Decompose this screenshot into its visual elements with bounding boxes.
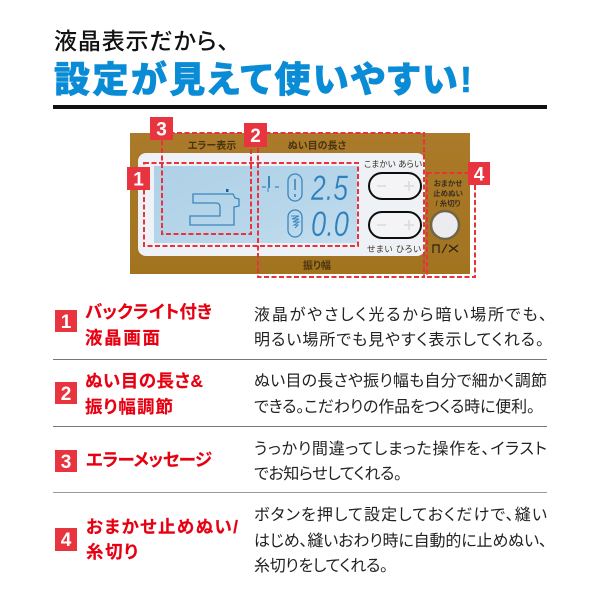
white control plate xyxy=(138,153,425,256)
label: zigzag width: 振り幅 xyxy=(303,259,331,272)
row 3 description: うっかり間違ってしまった操作を、イラスト xyxy=(254,440,547,458)
panel badge 2 xyxy=(244,123,267,147)
icon: stitch and scissors xyxy=(433,244,458,253)
label: stitch length: ぬい目の長さ xyxy=(288,140,346,152)
callout frame 3: error display xyxy=(162,133,251,234)
title underline rule xyxy=(53,105,547,109)
callout frame 1: LCD xyxy=(144,163,358,246)
title: intro line: 液晶表示だから、 xyxy=(54,28,229,54)
LCD screen xyxy=(154,166,357,243)
row 4 heading: おまかせ止めぬい/ xyxy=(86,517,238,537)
button: zigzag width xyxy=(369,212,421,238)
row 1 heading: バックライト付き xyxy=(85,302,212,322)
row 2 description: ぬい目の長さや振り幅も自分で細かく調節 xyxy=(254,372,547,390)
row 1 heading: 液晶画面 xyxy=(85,328,160,348)
callout frame 2: stitch adjustment xyxy=(258,133,424,277)
row 2 description xyxy=(254,372,547,416)
row 3 description xyxy=(254,440,547,483)
icon: straight stitch pill xyxy=(288,174,302,201)
icon: zigzag stitch pill xyxy=(288,210,302,237)
label: auto lock stitch / thread cut: 止めぬい xyxy=(433,188,463,198)
brown panel background xyxy=(130,133,470,274)
row 4 description: はじめ、縫いおわり時に自動的に止めぬい、 xyxy=(254,532,547,550)
row 3 description: でお知らせしてくれる。 xyxy=(254,465,402,483)
row 2 number badge xyxy=(55,382,77,405)
row 4 description: 糸切りをしてくれる。 xyxy=(254,557,388,575)
button: auto stitch xyxy=(431,211,459,239)
row 3 heading: エラーメッセージ xyxy=(86,450,212,470)
panel badge 4: 4 xyxy=(474,164,485,186)
row 4 number badge: 4 xyxy=(61,530,72,551)
row 4 heading xyxy=(86,517,238,562)
row 2: stitch length and width xyxy=(55,371,547,417)
panel badge 4 xyxy=(468,162,490,186)
panel badge 3 xyxy=(150,117,173,140)
row 3 number badge: 3 xyxy=(61,452,71,473)
panel badge 1: 1 xyxy=(133,170,144,190)
row 4 description: ボタンを押して設定しておくだけで、縫い xyxy=(254,506,547,524)
label: error display: エラー表示 xyxy=(188,139,236,152)
row 4: auto lock stitch and thread cut xyxy=(55,506,547,575)
label: auto lock stitch / thread cut xyxy=(433,179,463,208)
row 3 number badge xyxy=(55,450,77,473)
row 2 heading: ぬい目の長さ& xyxy=(85,371,203,391)
row 2 description: できる。こだわりの作品をつくる時に便利。 xyxy=(254,398,535,416)
label: fine / coarse: こまかい あらい xyxy=(364,159,422,169)
panel badge 3: 3 xyxy=(156,120,167,140)
row 1 description: 液晶がやさしく光るから暗い場所でも、 xyxy=(254,306,547,324)
readout: stitch length value: 2.5 xyxy=(310,169,348,208)
row 2 heading: 振り幅調節 xyxy=(85,397,173,417)
row 1 number badge xyxy=(55,310,77,333)
row 1 description xyxy=(254,306,547,349)
icon: sewing machine xyxy=(190,189,239,225)
row 1 number badge: 1 xyxy=(61,312,72,333)
label: narrow / wide: せまい ひろい xyxy=(367,244,421,254)
panel: sewing machine control panel xyxy=(130,133,470,274)
row 3: error message xyxy=(55,440,547,483)
row 4 heading: 糸切り xyxy=(86,542,138,562)
icon: needle position xyxy=(262,176,279,192)
row 1: backlit LCD xyxy=(55,302,547,349)
label: auto lock stitch / thread cut: おまかせ xyxy=(434,179,462,188)
row 4 number badge xyxy=(55,528,77,551)
row 2 heading xyxy=(85,371,203,417)
row 1 description: 明るい場所でも見やすく表示してくれる。 xyxy=(254,331,544,349)
panel badge 1 xyxy=(127,167,150,190)
row 4 description xyxy=(254,506,547,575)
callout frame 4: auto button xyxy=(427,173,475,277)
label: auto lock stitch / thread cut: / 糸切り xyxy=(435,198,461,208)
row 1 heading xyxy=(85,302,212,348)
panel badge 2: 2 xyxy=(250,126,261,147)
row 2 number badge: 2 xyxy=(61,384,71,405)
button: stitch length xyxy=(369,173,421,199)
title: blue headline: 設定が見えて使いやすい! xyxy=(54,59,472,100)
readout: zigzag width value: 0.0 xyxy=(311,205,349,244)
